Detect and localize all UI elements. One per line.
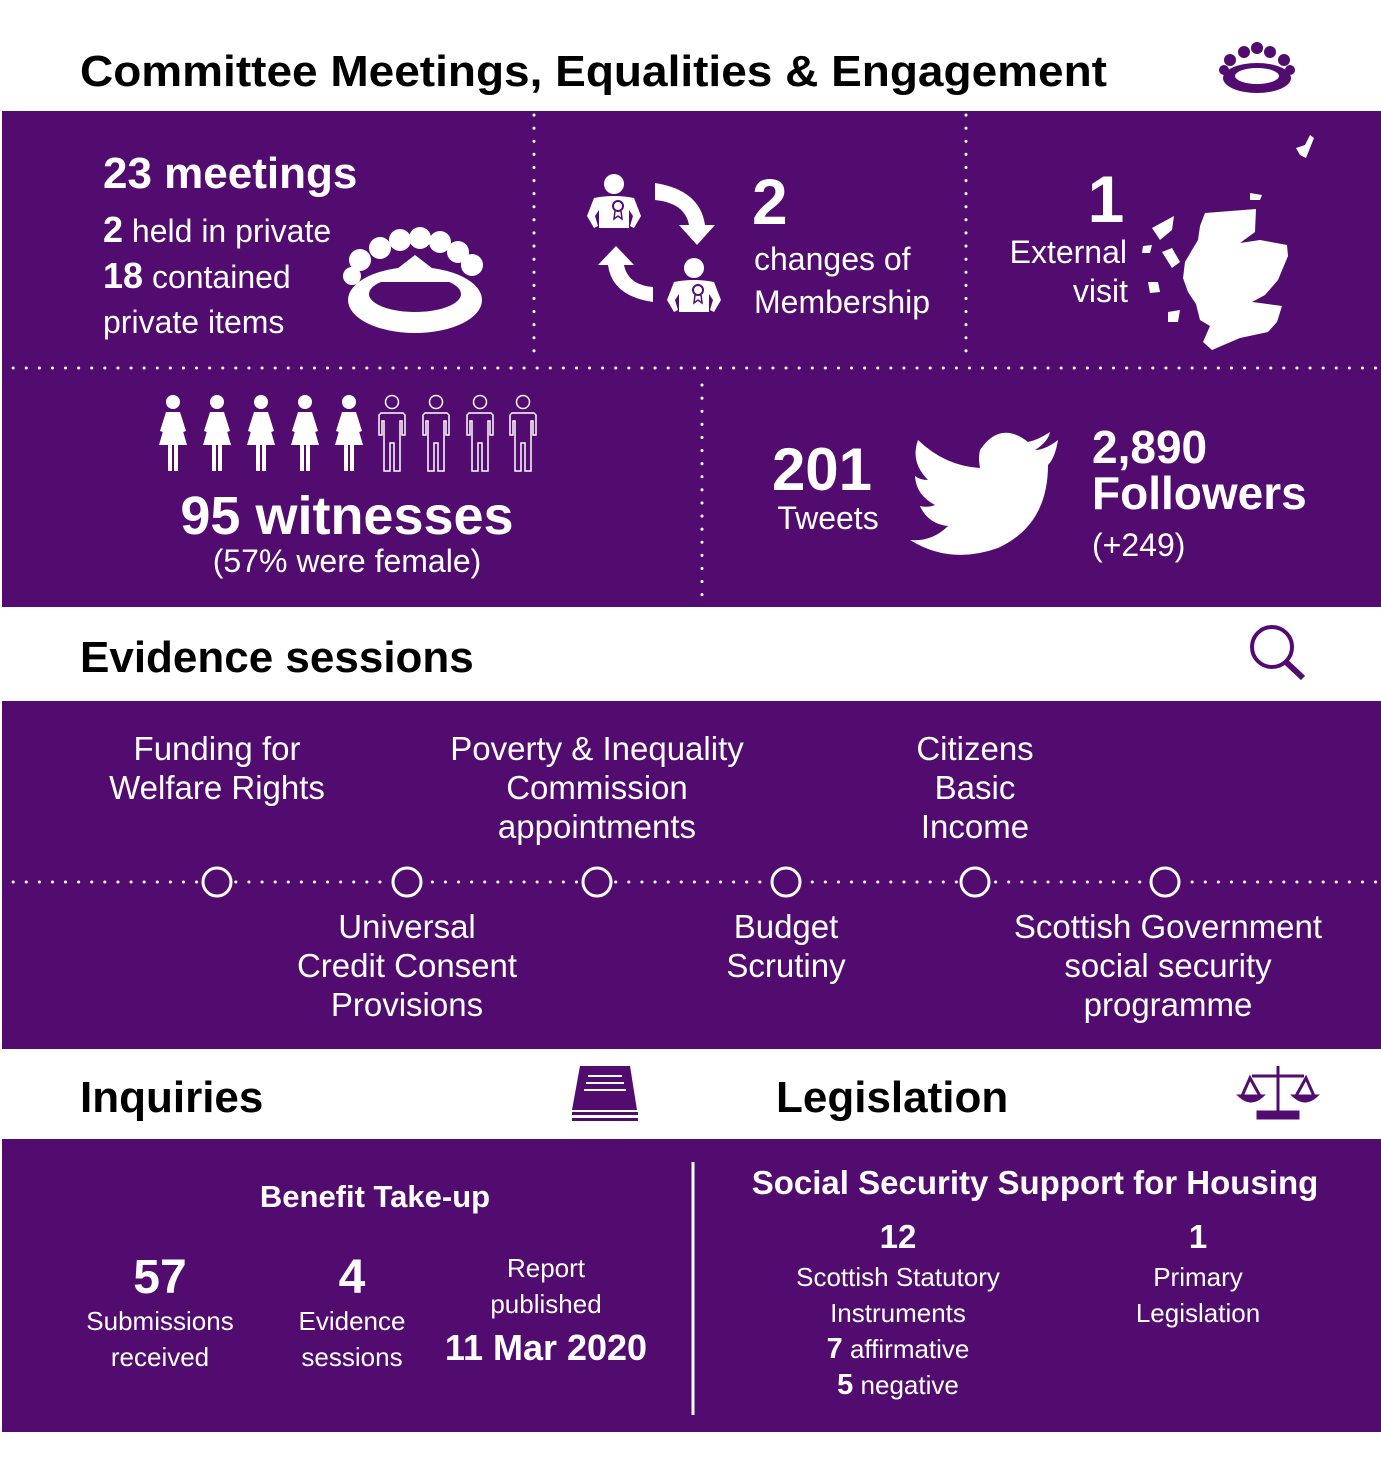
- text block: meetings: [103, 149, 357, 340]
- icon: twitter bird: [910, 432, 1058, 555]
- text block: legislation stats: 1: [1189, 1218, 1207, 1255]
- text block: meetings: private items: [103, 304, 284, 340]
- text block: benefit take-up: Submissions: [86, 1306, 234, 1336]
- text block: benefit take-up: 11 Mar 2020: [445, 1327, 647, 1368]
- text block: witnesses: 95 witnesses: [180, 486, 514, 546]
- icon: scotland map: [1142, 135, 1314, 350]
- text block: session topics: Budget: [734, 908, 838, 945]
- text block: benefit take-up: 57: [133, 1251, 187, 1304]
- text block: session topics: Commission: [506, 769, 688, 806]
- text block: tweets: Tweets: [777, 500, 879, 536]
- text block: legislation stats: [752, 1164, 1318, 1401]
- text block: benefit take-up: Evidence: [299, 1306, 405, 1336]
- text block: benefit take-up: sessions: [301, 1342, 403, 1372]
- text block: benefit take-up: Benefit Take-up: [260, 1179, 490, 1214]
- icon: report stack: [572, 1066, 638, 1121]
- panel: inquiries and legislation: [2, 1139, 1381, 1432]
- text block: benefit take-up: received: [111, 1342, 209, 1372]
- text block: session topics: Citizens: [916, 730, 1034, 767]
- text block: external visit: External: [1010, 234, 1127, 270]
- panel: committee stats: [0, 111, 1381, 607]
- text block: session topics: programme: [1084, 986, 1252, 1023]
- text block: legislation stats: Scottish Statutory: [796, 1262, 1000, 1292]
- icon: witnesses gender figures: [159, 395, 536, 471]
- text block: tweets: 201: [772, 436, 872, 503]
- text block: benefit take-up: 4: [339, 1251, 366, 1304]
- heading: evidence sessions: Evidence sessions: [80, 633, 474, 682]
- icon: membership change: [587, 174, 721, 312]
- text block: session topics: Credit Consent: [297, 947, 517, 984]
- text block: legislation stats: Social Security Support for Housing: [752, 1164, 1318, 1201]
- text block: session topics: Scrutiny: [726, 947, 846, 984]
- text block: session topics: Funding for: [134, 730, 300, 767]
- text block: session topics: [109, 730, 1322, 1023]
- text block: followers: 2,890: [1092, 421, 1207, 473]
- text block: followers: [1092, 421, 1307, 563]
- icon: meeting table: [1219, 42, 1295, 93]
- text block: session topics: Scottish Government: [1014, 908, 1322, 945]
- text block: session topics: Basic: [935, 769, 1015, 806]
- text block: external visit: visit: [1073, 273, 1128, 309]
- text block: changes of membership: [752, 166, 930, 320]
- text block: meetings: 23 meetings: [103, 149, 357, 198]
- icon: magnifier: [1252, 627, 1303, 678]
- text block: session topics: Income: [921, 808, 1029, 845]
- text block: meetings: 18 contained: [103, 255, 291, 296]
- text block: changes of membership: changes of: [754, 241, 911, 277]
- text block: legislation stats: Primary: [1153, 1262, 1243, 1292]
- text block: witnesses: [180, 486, 514, 579]
- text block: legislation stats: 12: [880, 1218, 916, 1255]
- text block: legislation stats: 5 negative: [837, 1369, 959, 1401]
- text block: session topics: Universal: [338, 908, 476, 945]
- text block: session topics: social security: [1064, 947, 1272, 984]
- text block: legislation stats: Instruments: [830, 1298, 966, 1328]
- text block: session topics: Provisions: [331, 986, 483, 1023]
- text block: benefit take-up: published: [490, 1289, 602, 1319]
- text block: benefit take-up: [86, 1179, 647, 1372]
- text block: changes of membership: Membership: [754, 284, 930, 320]
- panel: evidence sessions timeline: [0, 701, 1381, 1049]
- text block: followers: Followers: [1092, 467, 1307, 519]
- text block: legislation stats: Legislation: [1136, 1298, 1260, 1328]
- text block: meetings: 2 held in private: [103, 209, 331, 250]
- icon: meeting table white: [343, 227, 483, 333]
- heading: inquiries: Inquiries: [80, 1073, 263, 1122]
- text block: legislation stats: 7 affirmative: [827, 1333, 969, 1365]
- text block: benefit take-up: Report: [507, 1253, 586, 1283]
- text block: followers: (+249): [1092, 527, 1185, 563]
- text block: changes of membership: 2: [752, 166, 788, 238]
- text block: witnesses: (57% were female): [213, 543, 481, 579]
- icon: scales: [1240, 1066, 1316, 1118]
- text block: tweets: [772, 436, 879, 536]
- title: Committee Meetings, Equalities & Engagement: [80, 47, 1107, 96]
- heading: legislation: Legislation: [776, 1073, 1008, 1122]
- text block: session topics: Poverty & Inequality: [450, 730, 744, 767]
- text block: external visit: [1010, 162, 1128, 309]
- text block: session topics: appointments: [498, 808, 696, 845]
- text block: external visit: 1: [1088, 162, 1124, 236]
- text block: session topics: Welfare Rights: [109, 769, 325, 806]
